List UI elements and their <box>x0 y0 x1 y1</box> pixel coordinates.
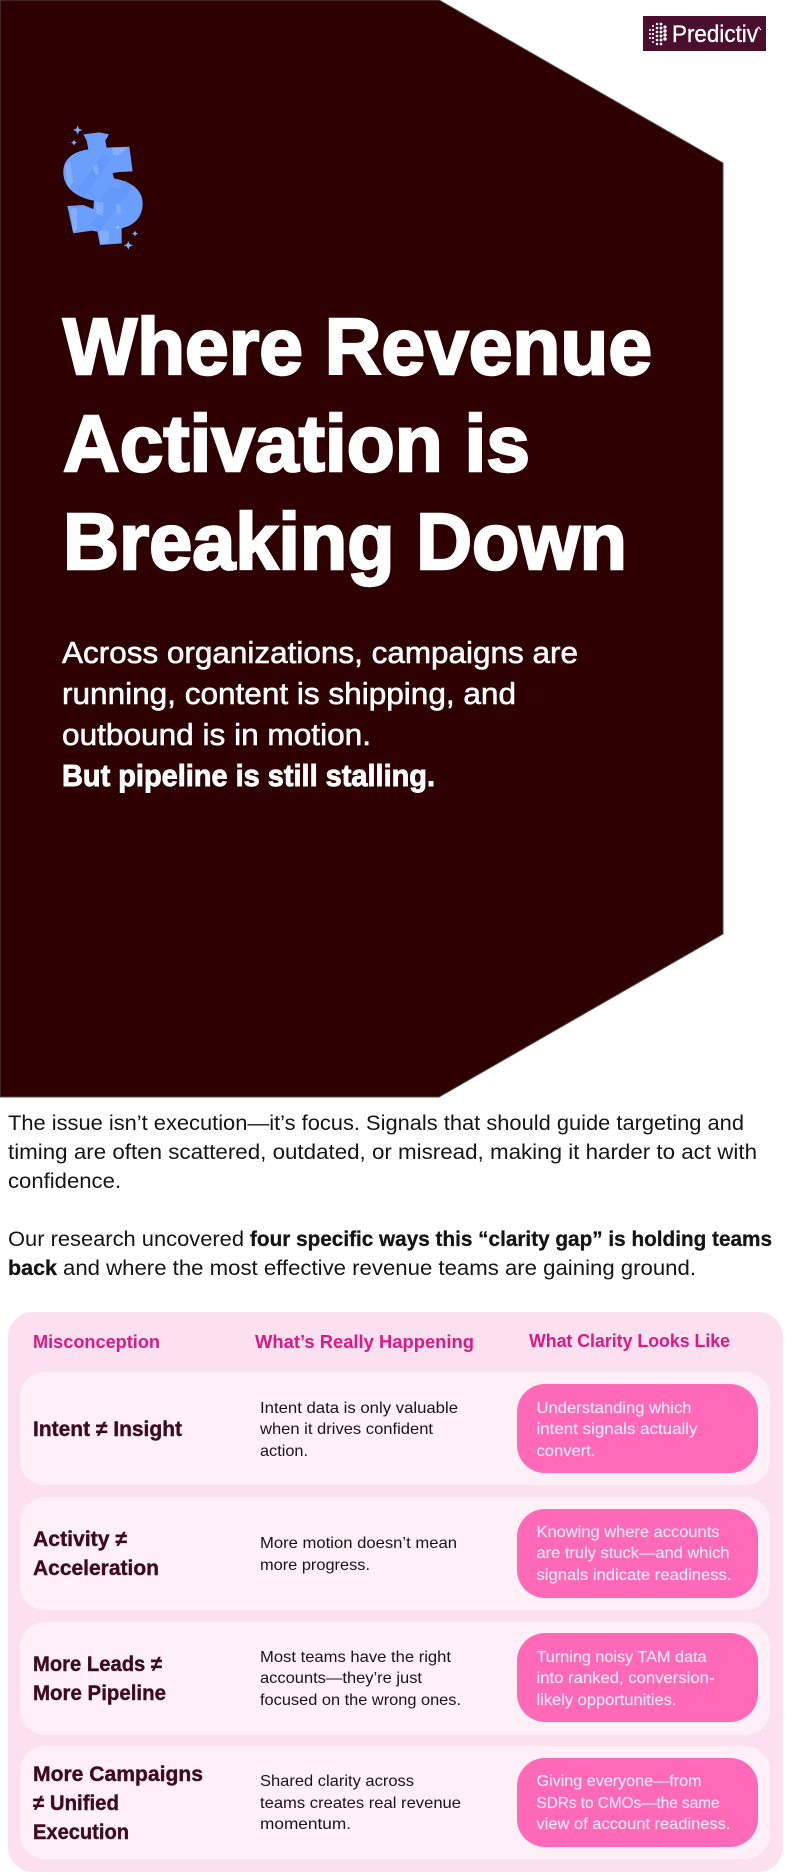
intro text: and where the most effective revenue teams are gaining ground. <box>63 1256 696 1280</box>
hero panel: dark hexagon <box>0 0 723 1097</box>
hero subtitle: running, content is shipping, and <box>62 676 516 711</box>
row 4: Campaigns vs Unified Execution: Execution <box>33 1820 129 1844</box>
row 1: Intent vs Insight <box>20 1372 770 1485</box>
row 3: Leads vs Pipeline <box>20 1622 770 1735</box>
intro text: four specific ways this “clarity gap” is holding teams <box>250 1227 772 1251</box>
row 2: Activity vs Acceleration: signals indicate readiness. <box>536 1567 732 1584</box>
table header: Misconception <box>33 1331 160 1352</box>
row 1: Intent vs Insight: action. <box>260 1443 308 1460</box>
hero subtitle <box>62 635 578 793</box>
logo: Predictiv: Predictiv <box>672 21 758 48</box>
logo: Predictiv <box>643 16 766 51</box>
row 2: Activity vs Acceleration: more progress. <box>260 1557 370 1574</box>
row 1: Intent vs Insight: when it drives confident <box>259 1421 434 1438</box>
row 2: Activity vs Acceleration: Knowing where accounts <box>536 1524 720 1541</box>
panel: comparison table <box>8 1312 783 1872</box>
row 4: Campaigns vs Unified Execution: view of account readiness. <box>536 1816 730 1833</box>
row 3: Leads vs Pipeline: likely opportunities. <box>536 1692 676 1709</box>
row 3: Leads vs Pipeline: into ranked, conversion- <box>536 1670 714 1687</box>
row 4: Campaigns vs Unified Execution: SDRs to CMOs—the same <box>536 1795 720 1812</box>
hero subtitle: outbound is in motion. <box>62 717 371 752</box>
row 1: Intent vs Insight: intent signals actually <box>536 1421 698 1438</box>
title: Activation is <box>63 399 530 488</box>
table header <box>33 1330 730 1352</box>
row 2: Activity vs Acceleration: Activity ≠ <box>33 1527 127 1551</box>
row 1: Intent vs Insight: Intent data is only valuable <box>260 1400 458 1417</box>
row 4: Campaigns vs Unified Execution: momentum. <box>260 1816 351 1833</box>
row 3: Leads vs Pipeline: focused on the wrong ones. <box>260 1692 461 1709</box>
row 3: Leads vs Pipeline: Most teams have the right <box>260 1649 452 1666</box>
row 3: Leads vs Pipeline: Turning noisy TAM data <box>536 1649 707 1666</box>
table header: What Clarity Looks Like <box>529 1330 730 1351</box>
intro text: Our research uncovered <box>8 1227 244 1251</box>
intro text: The issue isn’t execution—it’s focus. Signals that should guide targeting and <box>8 1111 744 1135</box>
row 3: Leads vs Pipeline: More Leads ≠ <box>33 1652 162 1676</box>
row 4: Campaigns vs Unified Execution: Shared clarity across <box>260 1773 414 1790</box>
row 1: Intent vs Insight: Intent ≠ Insight <box>33 1417 182 1441</box>
row 1: Intent vs Insight: convert. <box>536 1443 596 1460</box>
title <box>63 302 652 586</box>
row 4: Campaigns vs Unified Execution: teams creates real revenue <box>260 1795 461 1812</box>
title: Breaking Down <box>63 497 627 586</box>
title: Where Revenue <box>63 302 652 391</box>
row 2: Activity vs Acceleration <box>20 1497 770 1610</box>
intro text <box>8 1111 772 1280</box>
row 3: Leads vs Pipeline: More Pipeline <box>33 1681 166 1705</box>
row 4: Campaigns vs Unified Execution: ≠ Unified <box>33 1791 119 1815</box>
row 2: Activity vs Acceleration: More motion doesn’t mean <box>260 1535 457 1552</box>
row 2: Activity vs Acceleration: Acceleration <box>33 1556 159 1580</box>
intro text: confidence. <box>8 1169 121 1193</box>
hero subtitle: But pipeline is still stalling. <box>62 758 435 793</box>
row 1: Intent vs Insight: Understanding which <box>536 1400 692 1417</box>
intro text: timing are often scattered, outdated, or misread, making it harder to act with <box>8 1140 757 1164</box>
row 4: Campaigns vs Unified Execution: More Campaigns <box>33 1762 203 1786</box>
row 3: Leads vs Pipeline: accounts—they’re just <box>260 1670 423 1687</box>
table header: What’s Really Happening <box>255 1331 474 1352</box>
intro text: back <box>8 1256 57 1280</box>
row 4: Campaigns vs Unified Execution: Giving everyone—from <box>536 1773 702 1790</box>
row 2: Activity vs Acceleration: are truly stuck—and which <box>536 1545 730 1562</box>
hero subtitle: Across organizations, campaigns are <box>62 635 578 670</box>
row 4: Campaigns vs Unified Execution <box>20 1746 770 1859</box>
icon: blue dollar sign with sparkles <box>63 125 143 250</box>
